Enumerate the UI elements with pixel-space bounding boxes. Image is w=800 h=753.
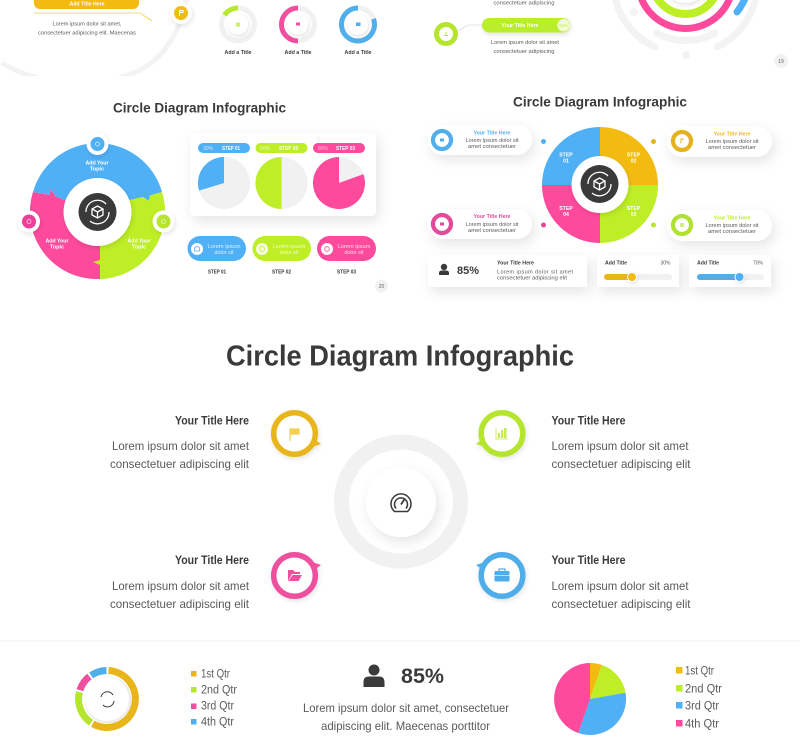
- panel: slider 30%: Add Title: [605, 260, 627, 266]
- panel: 85% stat card: 85%: [457, 265, 479, 277]
- text block: bottom-right: Your Title Here: [552, 555, 626, 567]
- node: pink: [18, 210, 40, 232]
- callout: yellow top-right: amet consectetuer: [708, 145, 756, 151]
- legend: pie: 4th Qtr: [685, 718, 719, 730]
- legend: pie: 1st Qtr: [685, 666, 714, 678]
- text block: top-left: [110, 416, 250, 471]
- pie: step 03 green: 50%: [260, 146, 271, 152]
- donut: green: [222, 8, 254, 56]
- icon: green download node: [436, 24, 456, 44]
- callout: blue top-left: [428, 125, 532, 155]
- text block: bottom-left: Lorem ipsum dolor sit amet: [112, 579, 250, 593]
- callout: yellow top-right: Your Title Here: [714, 132, 750, 138]
- pill: step 03: dolor sit: [344, 250, 364, 256]
- pill: step 03: [317, 236, 376, 276]
- panel: top-right slide fragment: [436, 0, 788, 68]
- node: blue briefcase: [476, 555, 523, 596]
- step labels: STEP: [627, 152, 641, 158]
- text block: Lorem ipsum dolor sit amet,: [52, 22, 122, 28]
- heading: right slide: Circle Diagram Infographic: [513, 94, 687, 110]
- icon: person: [439, 264, 449, 275]
- panel: slider 70%: Add Title: [697, 260, 719, 266]
- chart: three-part wheel: [18, 133, 174, 279]
- text block: stat description: [303, 701, 509, 733]
- callout: green bottom-right: amet consectetuer: [708, 229, 756, 235]
- page number 20: [375, 280, 388, 292]
- text block: bottom-right: [552, 555, 691, 611]
- segment labels: Add Your: [128, 238, 151, 244]
- hub: [572, 156, 628, 213]
- pie: step 01: [198, 143, 250, 209]
- icon: person large: [364, 664, 384, 687]
- panel: 85% stat card: [428, 255, 587, 287]
- pie: step 03 green: [256, 143, 308, 209]
- legend: donut: 3rd Qtr: [201, 700, 234, 712]
- segment labels: Topic: [90, 166, 104, 172]
- text block: top-left: Lorem ipsum dolor sit amet: [112, 439, 250, 453]
- legend: pie: 2nd Qtr: [685, 684, 722, 696]
- segment labels: Add Your: [46, 238, 69, 244]
- step labels: STEP: [559, 206, 573, 212]
- node: yellow flag: [274, 413, 321, 454]
- pill: step 02: STEP 02: [272, 270, 291, 276]
- green pill: [482, 18, 570, 32]
- text block: top-right: Your Title Here: [552, 416, 626, 428]
- page number 19: [774, 54, 788, 68]
- pill: step 02: [252, 236, 311, 276]
- pill: step 02: Lorem ipsum: [272, 244, 306, 250]
- text block: consectetuer adipiscing elit. Maecenas: [38, 30, 136, 36]
- text block: top-left: consectetuer adipiscing elit: [110, 457, 250, 471]
- text block: stat description: adipiscing elit. Maecenas porttitor: [321, 719, 490, 733]
- step labels: STEP: [627, 206, 641, 212]
- connector line: [458, 25, 482, 31]
- pie: step 03 pink: 80%: [318, 146, 329, 152]
- legend: donut: 1st Qtr: [201, 668, 230, 680]
- step labels: [559, 152, 641, 218]
- node: green: [152, 210, 174, 232]
- panel: three pie card: [190, 133, 376, 216]
- donut: pink: [282, 8, 314, 56]
- callout: green bottom-right: Lorem ipsum dolor sit: [706, 223, 759, 229]
- pie: step 03 green: STEP 03: [279, 146, 298, 152]
- text block: [38, 22, 136, 36]
- pill: step 02: dolor sit: [280, 250, 299, 256]
- panel: slider 70%: 70%: [753, 260, 764, 266]
- segment labels: [46, 160, 151, 250]
- pill: step 01: [188, 236, 246, 276]
- decorative big arc: [2, 0, 186, 83]
- panel: 85% stat card: Your Title Here: [497, 260, 534, 266]
- callout: green bottom-right: [667, 210, 772, 241]
- text block: bottom-right: Lorem ipsum dolor sit amet: [552, 579, 689, 593]
- donut: blue: Add a Title: [344, 50, 372, 56]
- text block: top-left: Your Title Here: [175, 416, 249, 428]
- bottom strip shadow: [0, 640, 800, 642]
- pill: step 01: Lorem ipsum: [208, 244, 241, 250]
- wheel hub: [64, 178, 132, 246]
- pie: step 03 pink: [313, 143, 365, 209]
- radial chart fragment: [616, 0, 755, 59]
- step labels: 02: [631, 158, 636, 164]
- callout: blue top-left: Your Title Here: [474, 130, 510, 136]
- panel: slider 30%: 30%: [660, 260, 671, 266]
- donut: blue: [341, 8, 374, 56]
- callout: pink bottom-left: Your Title Here: [474, 214, 510, 220]
- callout: yellow top-right: [667, 126, 772, 157]
- node: pink folder: [274, 555, 321, 596]
- icon: cycle arrows: [101, 692, 114, 707]
- pill: step 03: STEP 03: [337, 270, 356, 276]
- text block: stat description: Lorem ipsum dolor sit amet, consectetuer: [303, 701, 509, 715]
- text block below pill: consectetuer adipiscing: [494, 49, 554, 55]
- text block: top-right: consectetuer adipiscing elit: [552, 457, 691, 471]
- text block: top-right: Lorem ipsum dolor sit amet: [552, 439, 689, 453]
- central gauge circle: [342, 442, 460, 561]
- panel: slider 70%: [689, 255, 771, 287]
- panel: 85% stat card: consectetuer adipiscing elit: [497, 276, 567, 282]
- pie: step 01: STEP 01: [222, 146, 240, 152]
- stat: 85%: 85%: [401, 664, 444, 688]
- callout: yellow top-right: Lorem ipsum dolor sit: [706, 139, 759, 145]
- connector dots: [541, 139, 656, 228]
- callout: pink bottom-left: amet consectetuer: [468, 228, 516, 234]
- callout: pink bottom-left: Lorem ipsum dolor sit: [466, 222, 519, 228]
- yellow title pill: Add Title Here: [70, 2, 104, 8]
- yellow leader line: [34, 13, 152, 21]
- callout: blue top-left: Lorem ipsum dolor sit: [466, 138, 519, 144]
- legend: donut: 4th Qtr: [201, 716, 234, 728]
- pill: step 01: dolor sit: [214, 250, 234, 256]
- main title: Circle Diagram Infographic: [226, 340, 574, 372]
- callout: pink bottom-left: [428, 209, 532, 239]
- node: blue: [86, 133, 108, 155]
- callout: blue top-left: amet consectetuer: [468, 144, 516, 150]
- text block: bottom-right: consectetuer adipiscing elit: [552, 597, 691, 611]
- legend: donut: [191, 668, 237, 728]
- text block: bottom-left: [110, 555, 250, 611]
- legend: pie: 3rd Qtr: [685, 700, 719, 712]
- callout: green bottom-right: Your Title Here: [714, 216, 750, 222]
- panel: 85% stat card: Lorem ipsum dolor sit amet: [497, 270, 573, 276]
- text block: bottom-left: consectetuer adipiscing elit: [110, 597, 250, 611]
- text block above pill: consectetuer adipiscing: [494, 0, 554, 6]
- segment labels: Topic: [50, 244, 64, 250]
- legend: donut: 2nd Qtr: [201, 684, 237, 696]
- page number 20: 20: [379, 284, 384, 290]
- segment labels: Topic: [132, 244, 146, 250]
- icon: gauge: [391, 494, 411, 512]
- heading: left slide: Circle Diagram Infographic: [113, 100, 286, 116]
- donut: pink: Add a Title: [284, 50, 312, 56]
- segment labels: Add Your: [86, 160, 109, 166]
- icon: flag node: [170, 2, 192, 24]
- pill: step 01: STEP 01: [208, 270, 226, 276]
- green pill: 85%: [559, 23, 568, 28]
- node: green chart: [476, 413, 523, 454]
- text block: top-right: [552, 416, 691, 471]
- step labels: STEP: [559, 152, 573, 158]
- text block below pill: Lorem ipsum dolor sit amet: [491, 40, 559, 46]
- step labels: 01: [563, 158, 569, 164]
- donut: green: Add a Title: [224, 50, 252, 56]
- text block: bottom-left: Your Title Here: [175, 555, 249, 567]
- text block below pill: [491, 40, 559, 55]
- pie: step 01: 30%: [203, 146, 214, 152]
- pill: step 03: Lorem ipsum: [338, 244, 371, 250]
- donut chart: quarters: [79, 670, 135, 727]
- pie: step 03 pink: STEP 03: [336, 146, 355, 152]
- chart: four-step circle: [542, 127, 658, 243]
- pie chart: quarters: [554, 663, 626, 735]
- green pill: Your Title Here: [502, 23, 538, 29]
- legend: pie: [676, 666, 722, 730]
- step labels: 04: [563, 212, 569, 218]
- panel: slider 30%: [597, 255, 679, 287]
- yellow title pill: [34, 0, 139, 9]
- page number 19: 19: [778, 59, 784, 65]
- step labels: 03: [631, 212, 636, 218]
- panel: top-left slide fragment: [2, 0, 374, 83]
